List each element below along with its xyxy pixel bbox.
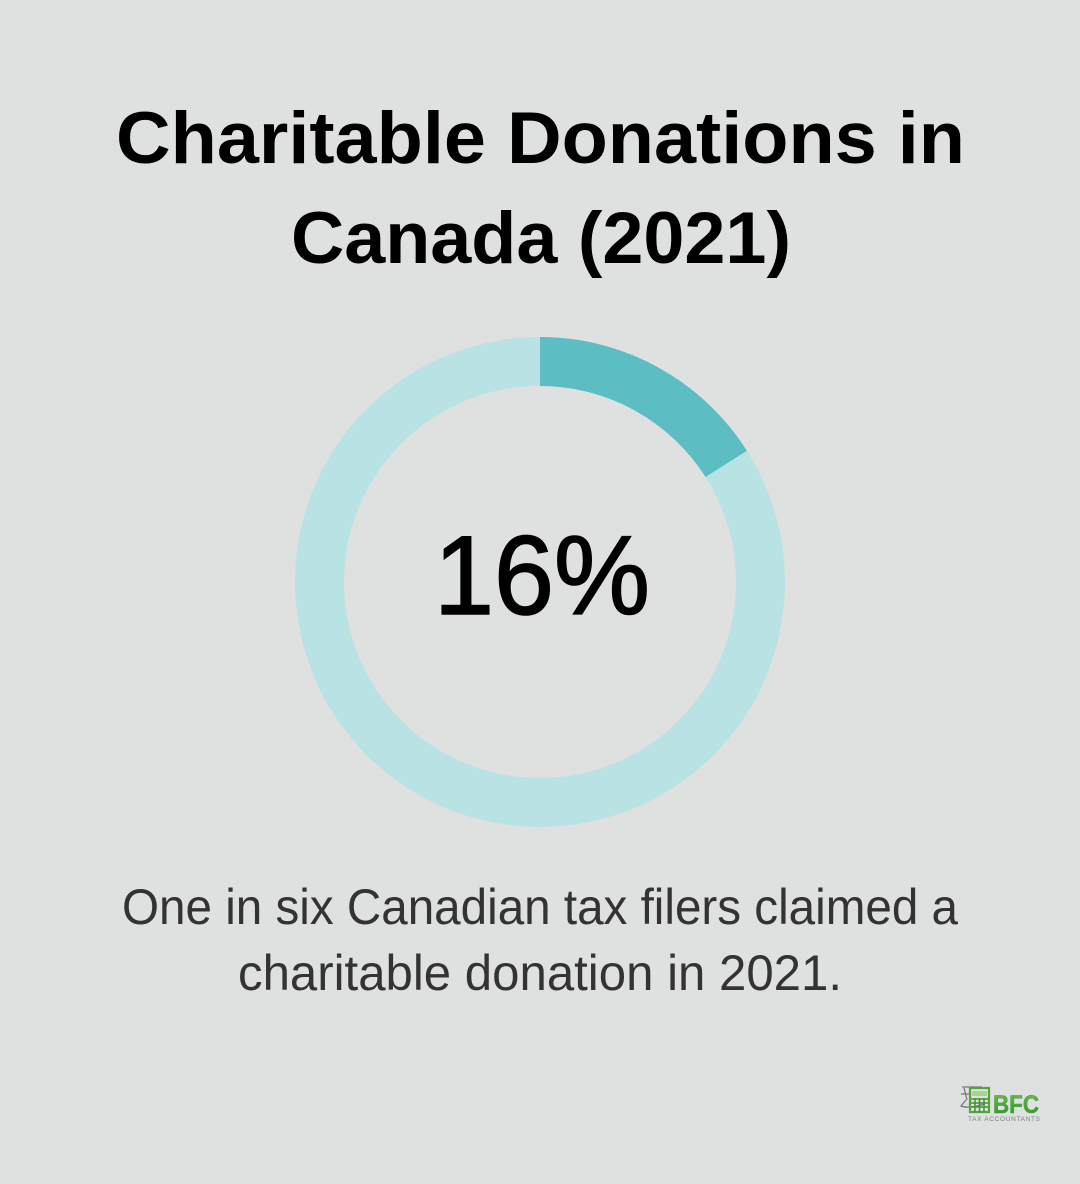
logo wordmark: BFC bbox=[993, 1091, 1039, 1119]
big number: 16% bbox=[434, 513, 650, 638]
title: Canada (2021) bbox=[291, 198, 791, 279]
title bbox=[116, 98, 965, 279]
description text: One in six Canadian tax filers claimed a bbox=[122, 879, 958, 935]
title: Charitable Donations in bbox=[116, 98, 965, 179]
logo tagline: TAX ACCOUNTANTS bbox=[968, 1116, 1041, 1123]
donut chart: 16% bbox=[320, 337, 760, 802]
description text bbox=[122, 879, 958, 1001]
logo: BFC Tax Accountants bbox=[961, 1087, 1041, 1123]
description text: charitable donation in 2021. bbox=[238, 945, 842, 1001]
icon: calculator bbox=[961, 1087, 989, 1112]
